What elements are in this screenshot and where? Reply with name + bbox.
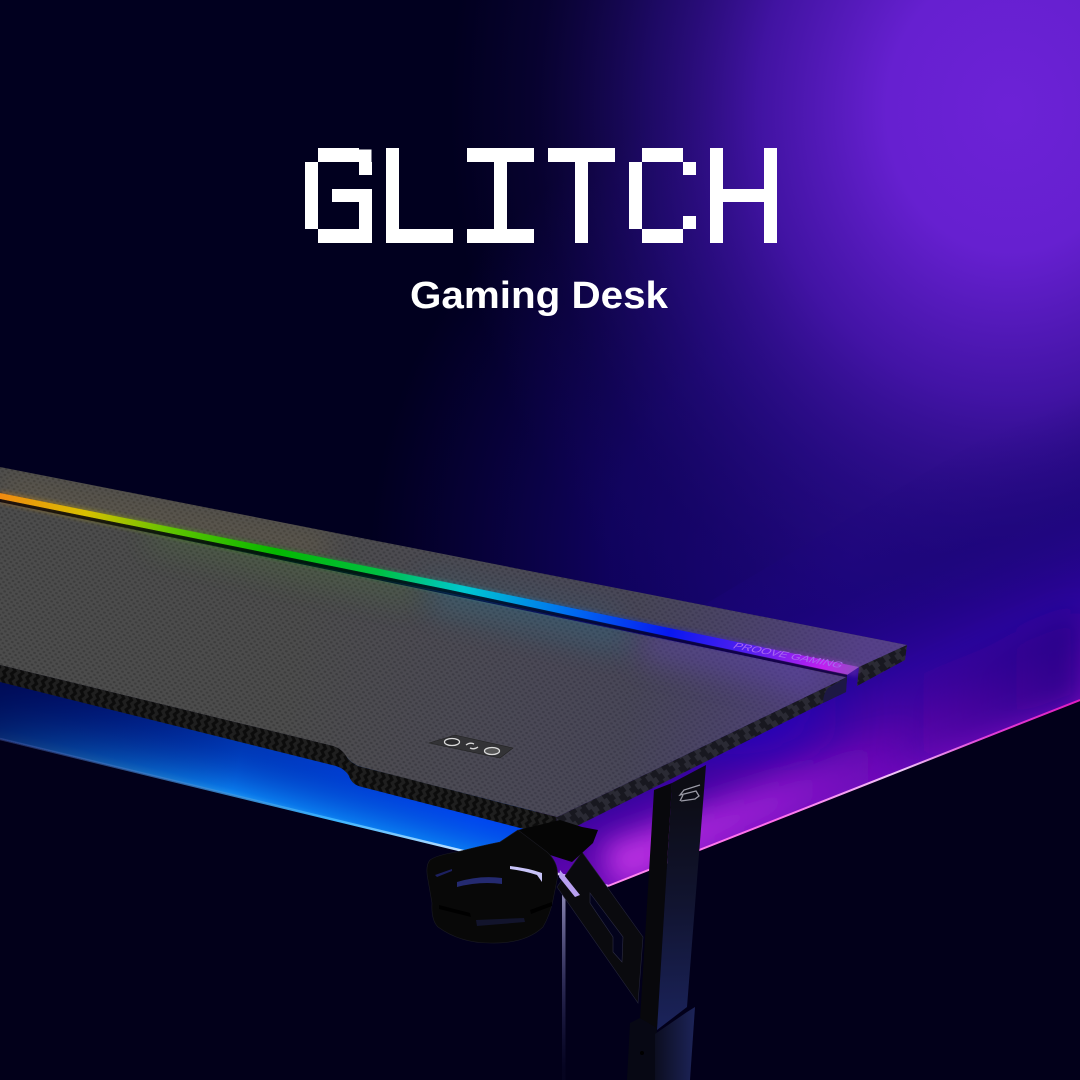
icon: touch button 3 — [484, 748, 500, 754]
title: GLITCH: H — [696, 123, 791, 286]
desk leg — [627, 765, 706, 1080]
icon: touch button 1 — [444, 738, 460, 746]
leg lower sleeve — [627, 1007, 695, 1080]
floor: dark lower surface — [0, 700, 1080, 1080]
icon: brand logo on leg — [680, 785, 700, 801]
cup body — [427, 830, 558, 943]
title: GLITCH: I — [456, 123, 545, 286]
brace arm with slot — [557, 852, 643, 1003]
clamp arm — [500, 820, 598, 870]
desktop front edge — [0, 665, 557, 837]
floor edge light lines — [0, 700, 1080, 886]
title: GLITCH — [293, 123, 791, 286]
desktop: back strip with carbon texture — [0, 467, 907, 686]
RGB light strip — [0, 493, 859, 676]
title: GLITCH: G — [293, 123, 382, 286]
title: GLITCH: C — [618, 123, 703, 286]
PROOVE GAMING logo text: PROOVE GAMING — [730, 641, 846, 670]
desktop: main surface with carbon texture — [0, 502, 847, 817]
slot end cap — [823, 677, 847, 703]
strip right end edge — [857, 645, 907, 686]
title: GLITCH: L — [364, 123, 461, 286]
subtitle: Gaming Desk: Gaming Desk — [410, 275, 669, 317]
icon: touch button 2 — [466, 743, 478, 749]
cup holder — [427, 820, 598, 943]
floor glow: blue band under desk — [0, 680, 620, 886]
title: GLITCH: T — [541, 123, 622, 286]
leg upper section — [640, 765, 706, 1030]
vertical light beam — [562, 895, 566, 1080]
touch control panel — [429, 735, 513, 758]
desktop right side edge — [555, 677, 847, 837]
cup slits — [457, 877, 502, 887]
floor glow: violet and magenta right side — [536, 524, 1080, 885]
